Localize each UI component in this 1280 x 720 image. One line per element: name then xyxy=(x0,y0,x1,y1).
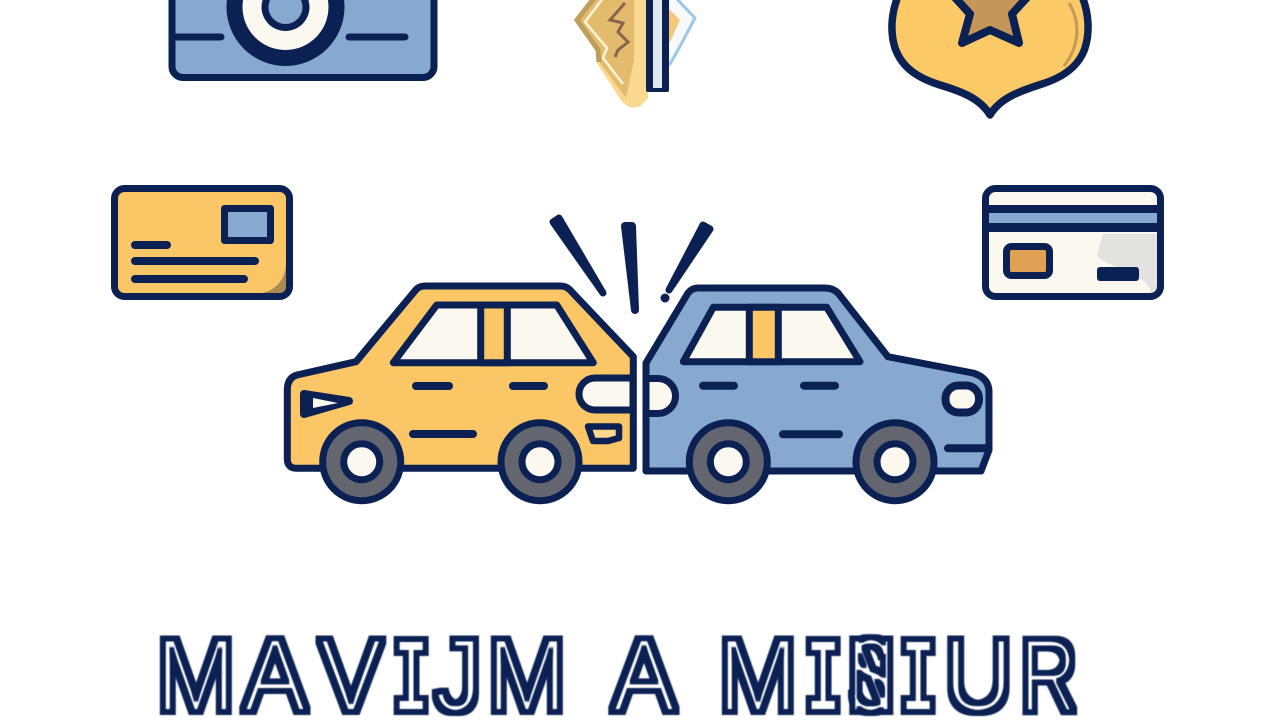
car body xyxy=(287,286,633,468)
icon: credit card xyxy=(985,188,1161,296)
rear wheel xyxy=(501,423,579,501)
icon: key xyxy=(575,0,695,107)
headlight xyxy=(946,386,979,412)
rear bumper xyxy=(646,378,676,414)
car body xyxy=(646,288,989,471)
rear wheel xyxy=(689,423,767,501)
front wheel xyxy=(323,423,401,501)
car trim xyxy=(413,386,544,434)
car windows xyxy=(683,307,860,362)
title xyxy=(156,616,1077,720)
yellow car xyxy=(287,286,633,501)
blue car xyxy=(646,288,989,501)
tail light xyxy=(588,426,619,441)
car trim xyxy=(703,386,988,448)
icon: impact burst xyxy=(553,218,710,310)
icon: camera xyxy=(172,0,434,78)
front wheel xyxy=(856,423,934,501)
icon: police badge xyxy=(892,0,1088,115)
rear bumper xyxy=(579,378,633,410)
headlight xyxy=(304,394,349,414)
icon: id card xyxy=(114,188,290,296)
car windows xyxy=(393,305,593,363)
